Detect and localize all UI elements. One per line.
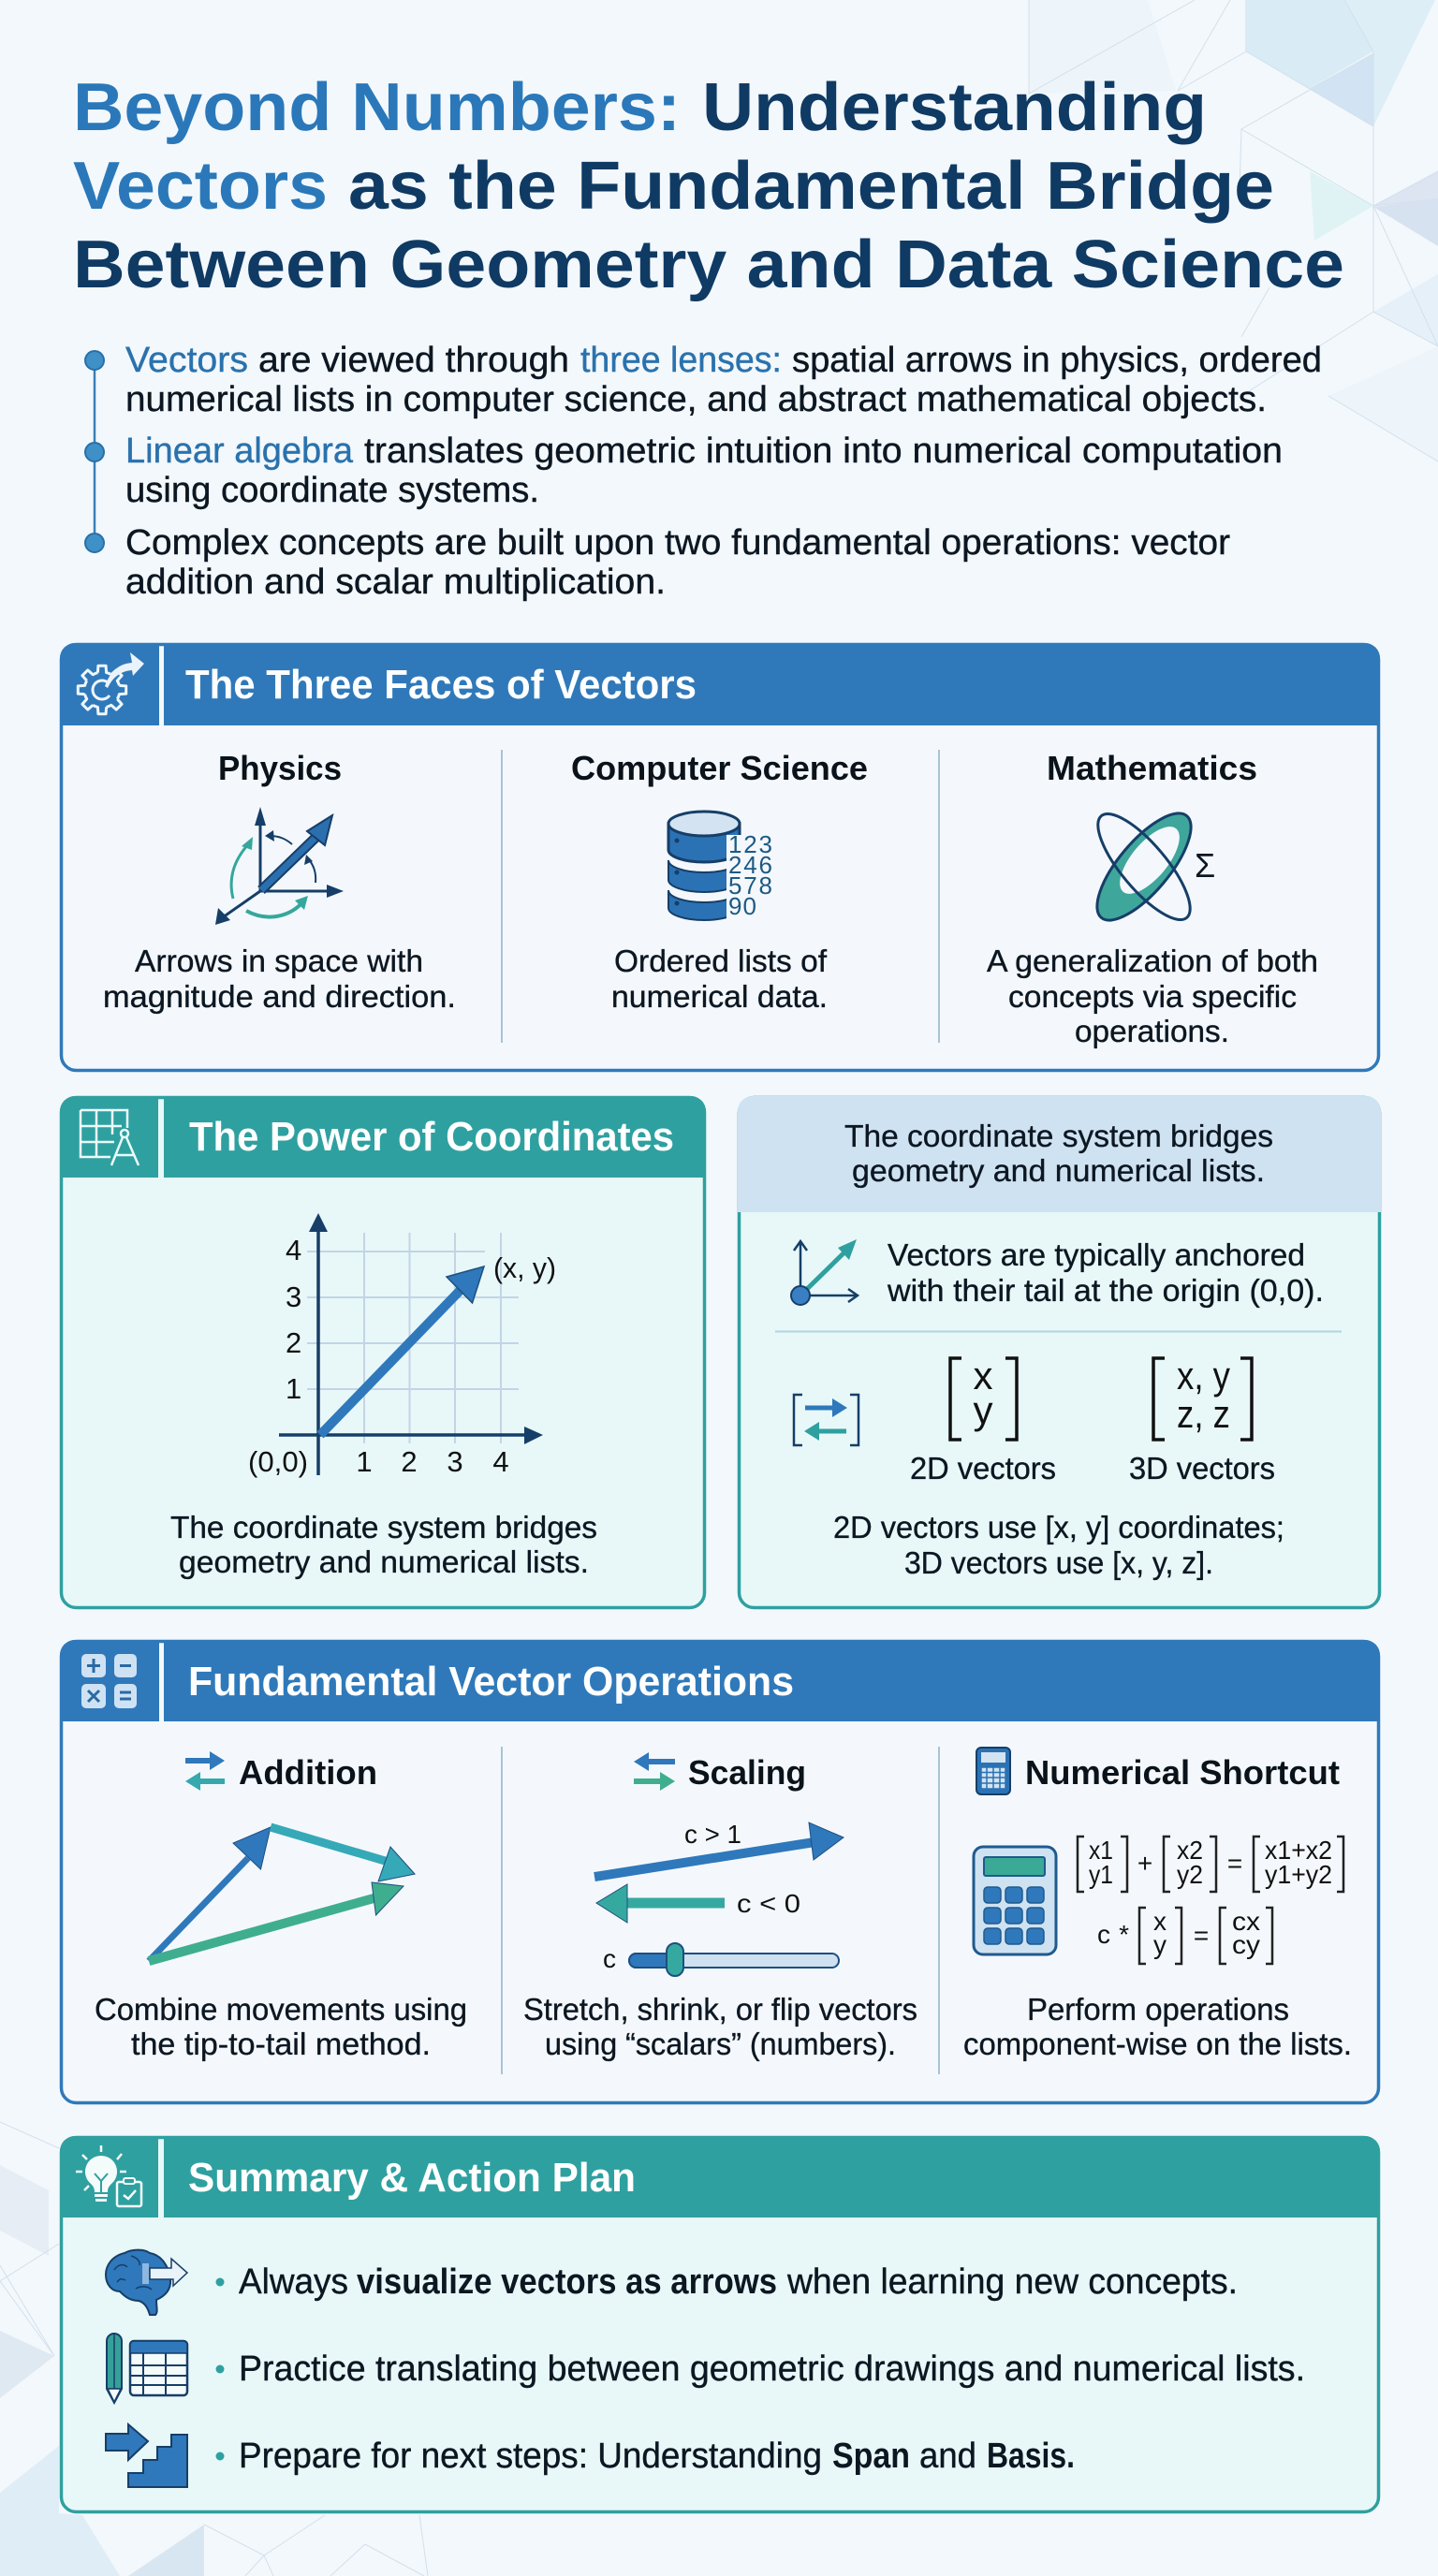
action item: next steps: Span — [832, 2437, 910, 2476]
column: computer science: Computer Science — [571, 749, 868, 787]
formula: scalar multiplication: x — [1153, 1907, 1167, 1936]
key points list: three lenses: — [580, 341, 782, 380]
coordinate chart: 1 — [286, 1372, 301, 1405]
key points list: using coordinate systems. — [125, 471, 539, 510]
formula: scalar multiplication: cx — [1232, 1907, 1260, 1936]
icon: scaling arrows — [634, 1752, 675, 1791]
formula: component-wise addition — [1078, 1836, 1343, 1892]
column: physics: magnitude and direction. — [103, 979, 456, 1014]
formula: component-wise addition: y1 — [1089, 1860, 1113, 1889]
key points list: are viewed through — [258, 341, 569, 380]
column: addition: Addition — [239, 1753, 377, 1792]
column: physics: Physics — [218, 749, 342, 787]
formula: component-wise addition: x2 — [1177, 1836, 1203, 1865]
coordinate chart: 1 — [356, 1445, 373, 1478]
key points list: Complex concepts are built upon two fundamental operations: vector — [125, 523, 1230, 563]
title: Vectors — [73, 149, 328, 224]
column: scaling: using “scalars” (numbers). — [545, 2027, 896, 2061]
key points list: translates geometric intuition into numerical computation — [364, 432, 1283, 471]
title: Beyond Numbers: — [73, 70, 681, 145]
icon: arrow and stairs — [106, 2424, 187, 2487]
icon: database with numbers: 246 — [728, 851, 772, 879]
icon: grid and compass — [81, 1110, 139, 1165]
3D vector matrix: x, y — [1177, 1354, 1230, 1398]
icon: calculator — [974, 1847, 1056, 1954]
action item: next steps: Prepare for next steps: Understanding — [239, 2437, 822, 2476]
3D vector matrix: 3D vectors — [1129, 1451, 1275, 1486]
key points list: Linear algebra — [125, 432, 354, 471]
coordinate chart: (0,0) — [248, 1445, 308, 1478]
column: computer science: Ordered lists of — [614, 944, 828, 978]
title: as the Fundamental Bridge — [348, 149, 1274, 224]
icon: brain with arrow — [106, 2250, 187, 2315]
2D vector matrix: y — [974, 1388, 992, 1432]
formula: component-wise addition: + — [1137, 1849, 1152, 1878]
column: numerical shortcut: component-wise on the lists. — [963, 2027, 1352, 2061]
column: numerical shortcut: Perform operations — [1027, 1992, 1289, 2027]
column: mathematics: A generalization of both — [987, 944, 1318, 978]
key points list: addition and scalar multiplication. — [125, 563, 666, 602]
column: computer science — [571, 749, 868, 1014]
panel heading: Summary & Action Plan — [188, 2155, 636, 2201]
key points list: Vectors — [125, 341, 248, 380]
action item: next steps: Basis. — [987, 2437, 1075, 2476]
caption — [170, 1510, 597, 1579]
panel: summary and action plan — [60, 2136, 1380, 2512]
3D vector matrix: z, z — [1177, 1392, 1230, 1436]
icon: small calculator — [976, 1748, 1010, 1794]
action item: next steps — [106, 2424, 1075, 2487]
diagram: scaling vectors and slider — [594, 1820, 844, 1976]
coordinate chart: 2 — [286, 1326, 301, 1359]
panel: the three faces of vectors — [60, 643, 1380, 1071]
action item: visualize: when learning new concepts. — [786, 2262, 1238, 2302]
formula: component-wise addition: y1+y2 — [1265, 1860, 1332, 1889]
icon: database with numbers: 123 — [728, 830, 772, 858]
caption: The coordinate system bridges — [170, 1510, 597, 1544]
column: computer science: numerical data. — [611, 979, 828, 1014]
icon: database with numbers: 578 — [728, 871, 772, 900]
icon: math operators — [81, 1654, 137, 1708]
panel heading: The Power of Coordinates — [189, 1114, 674, 1160]
icon: anchored vector at origin — [791, 1239, 858, 1305]
icon: addition arrows — [185, 1751, 225, 1791]
panel header text: geometry and numerical lists. — [852, 1153, 1265, 1188]
icon: lightbulb and clipboard — [76, 2145, 141, 2206]
caption: 2D vectors use [x, y] coordinates; — [833, 1510, 1284, 1544]
column: physics: Arrows in space with — [135, 944, 423, 978]
2D vector matrix: 2D vectors — [910, 1451, 1056, 1486]
title: Between Geometry and Data Science — [73, 227, 1344, 302]
diagram: scaling vectors and slider: c < 0 — [737, 1889, 800, 1918]
action item: practice — [107, 2334, 1305, 2403]
column: mathematics: operations. — [1075, 1014, 1229, 1048]
panel: the power of coordinates — [60, 1096, 706, 1608]
panel header text — [844, 1119, 1273, 1188]
icon: intersecting orbits with sigma: Σ — [1195, 846, 1215, 885]
title — [73, 70, 1344, 302]
column: numerical shortcut — [963, 1748, 1352, 2061]
caption: geometry and numerical lists. — [179, 1544, 589, 1579]
key points list: numerical lists in computer science, and abstract mathematical objects. — [125, 380, 1267, 419]
action item: visualize: visualize vectors as arrows — [357, 2262, 777, 2302]
formula: component-wise addition: x1+x2 — [1265, 1836, 1332, 1865]
action item: visualize — [106, 2250, 1238, 2315]
diagram: scaling vectors and slider: c > 1 — [684, 1820, 741, 1849]
formula: scalar multiplication: c * — [1097, 1920, 1129, 1949]
icon: pencil and table — [107, 2334, 187, 2403]
column: scaling: Stretch, shrink, or flip vectors — [523, 1992, 917, 2027]
action item: next steps: and — [919, 2437, 976, 2476]
diagram: tip-to-tail addition — [149, 1827, 415, 1961]
column: addition: Combine movements using — [95, 1992, 467, 2027]
icon: database with numbers: 90 — [728, 892, 756, 920]
panel: fundamental vector operations — [60, 1640, 1380, 2102]
title: Understanding — [702, 70, 1207, 145]
3D vector matrix — [1129, 1354, 1275, 1486]
panel header text: The coordinate system bridges — [844, 1119, 1273, 1153]
coordinate chart: (x, y) — [493, 1251, 556, 1284]
coordinate chart: 4 — [286, 1234, 301, 1266]
diagram: scaling vectors and slider: c — [603, 1944, 616, 1973]
action item: practice: Practice translating between geometric drawings and numerical lists. — [239, 2349, 1305, 2389]
formula: scalar multiplication: cy — [1232, 1930, 1260, 1959]
panel heading: Fundamental Vector Operations — [188, 1659, 794, 1705]
column: addition — [95, 1751, 467, 2061]
text: anchored at origin: with their tail at the origin (0,0). — [887, 1273, 1324, 1308]
icon: database with numbers — [668, 812, 779, 923]
formula: component-wise addition: y2 — [1177, 1860, 1203, 1889]
panel heading: The Three Faces of Vectors — [185, 662, 697, 708]
key points list — [85, 341, 1322, 602]
coordinate chart — [248, 1213, 556, 1478]
formula: scalar multiplication: = — [1194, 1921, 1209, 1950]
icon: gear with arrow — [78, 652, 144, 714]
formula: component-wise addition: = — [1227, 1849, 1242, 1878]
column: scaling — [523, 1752, 917, 2061]
coordinate chart: 2 — [401, 1445, 418, 1478]
caption — [833, 1510, 1284, 1580]
column: addition: the tip-to-tail method. — [131, 2027, 431, 2061]
caption: 3D vectors use [x, y, z]. — [904, 1545, 1213, 1580]
column: mathematics: Mathematics — [1047, 749, 1257, 787]
coordinate chart: 3 — [286, 1281, 301, 1313]
icon: 3D axes and vector — [215, 807, 344, 925]
coordinate chart: 3 — [447, 1445, 463, 1478]
column: mathematics: concepts via specific — [1008, 979, 1297, 1014]
column: mathematics — [987, 749, 1318, 1048]
formula: component-wise addition: x1 — [1089, 1836, 1113, 1865]
text: anchored at origin — [887, 1237, 1324, 1308]
coordinate chart: 4 — [492, 1445, 509, 1478]
key points list: spatial arrows in physics, ordered — [792, 341, 1322, 380]
action item: visualize: Always — [239, 2262, 348, 2302]
column: numerical shortcut: Numerical Shortcut — [1025, 1753, 1340, 1792]
formula: scalar multiplication: y — [1153, 1930, 1167, 1959]
column: physics — [103, 749, 456, 1014]
formula: scalar multiplication — [1097, 1907, 1272, 1964]
icon: bracketed two-way arrows — [794, 1395, 858, 1445]
2D vector matrix: x — [974, 1354, 992, 1398]
text: anchored at origin: Vectors are typically anchored — [888, 1237, 1305, 1272]
panel: vector notation — [738, 1096, 1381, 1608]
column: scaling: Scaling — [688, 1753, 806, 1792]
icon: intersecting orbits with sigma — [1082, 799, 1215, 934]
2D vector matrix — [910, 1354, 1056, 1486]
